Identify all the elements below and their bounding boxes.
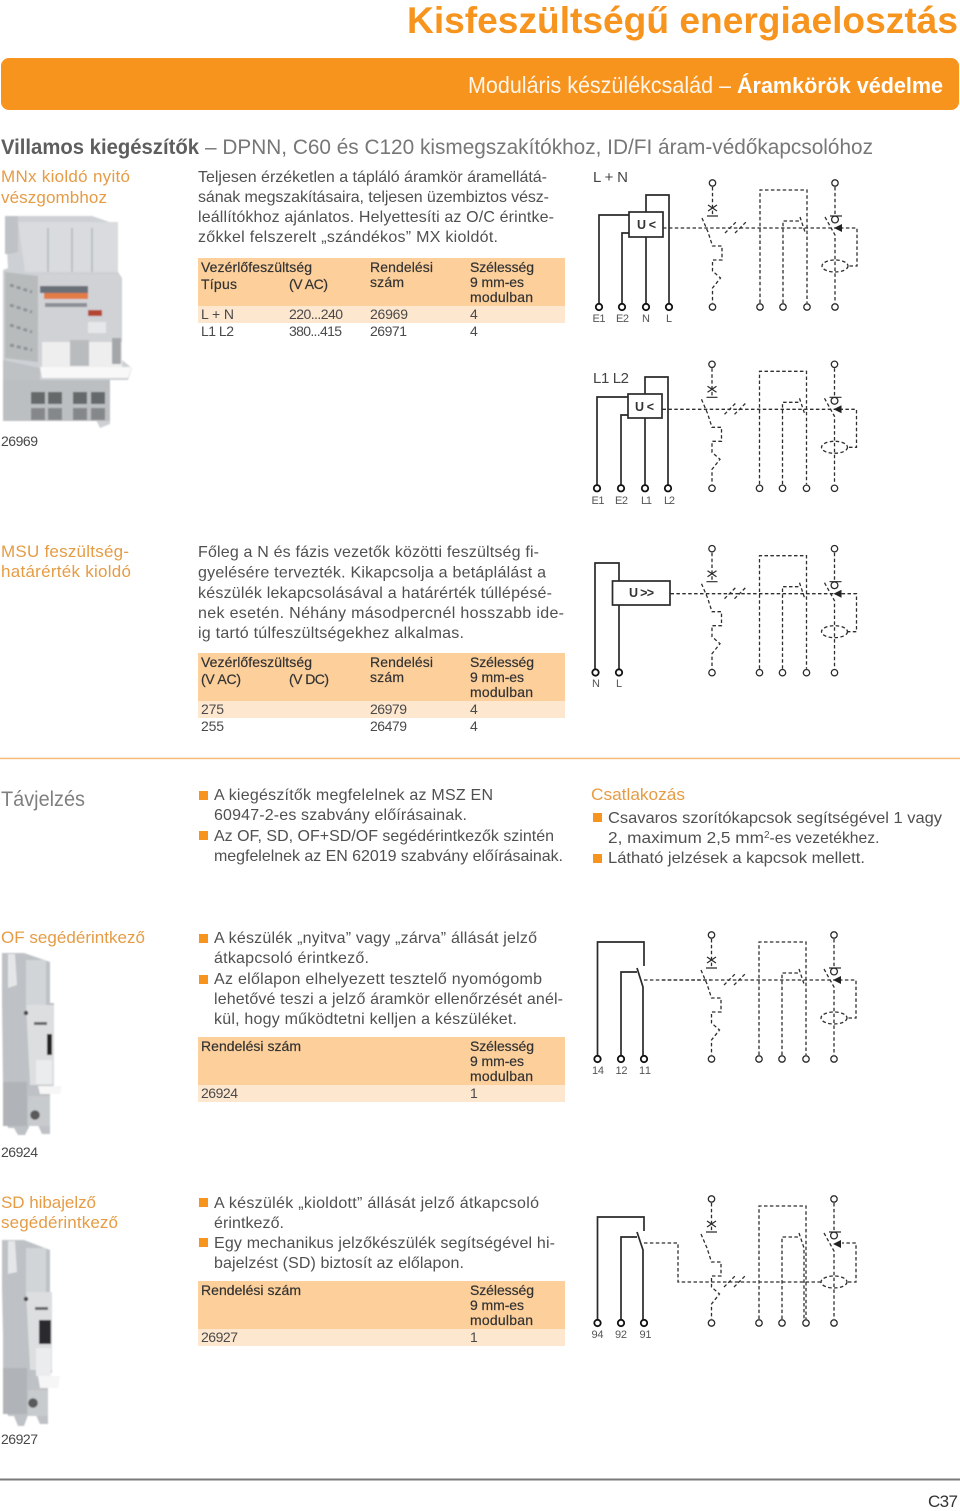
table: OF: Rendelési szám xyxy=(201,1038,301,1054)
text block: MSU description: nek esetén. Néhány másodpercnél hosszabb ide- xyxy=(198,605,564,622)
diagram: L + N: E1 xyxy=(592,313,606,325)
photo: MNx device xyxy=(3,216,132,428)
list: Csatlakozás: Látható jelzések a kapcsok mellett. xyxy=(608,850,865,867)
table: MNx: 26969 xyxy=(370,306,408,322)
heading: MNx xyxy=(1,167,130,207)
table: MNx: Szélesség xyxy=(470,259,534,275)
list: SD: bajelzést (SD) biztosít az előlapon. xyxy=(214,1255,464,1272)
table: OF: 9 mm-es xyxy=(470,1053,524,1069)
table: SD: Rendelési szám xyxy=(201,1282,301,1298)
table: MSU: 275 xyxy=(201,701,224,717)
table: MSU: 26479 xyxy=(370,718,407,734)
table: OF: Szélesség xyxy=(470,1038,534,1054)
list: Csatlakozás: -es vezetékhez. xyxy=(770,830,880,847)
text block: MNx description: sának megszakításaira, teljesen üzembiztos vész- xyxy=(198,189,549,206)
table: MSU: Szélesség xyxy=(470,654,534,670)
diagram: L1 L2 xyxy=(592,361,856,507)
table: MSU: 4 xyxy=(470,718,478,734)
list: Csatlakozás: Csatlakozás xyxy=(591,785,685,804)
diagram: MSU U>> xyxy=(592,546,856,690)
table: OF: 1 xyxy=(470,1085,478,1101)
text block: MNx description: zőkkel felszerelt „szándékos” MX kioldót. xyxy=(198,229,498,246)
list: OF: kül, hogy működtetni kelljen a készüléket. xyxy=(214,1011,517,1028)
diagram: L + N xyxy=(592,169,857,325)
list: Távjelzés: Az OF, SD, OF+SD/OF segédérintkezők szintén xyxy=(214,828,554,845)
diagram: L + N: N xyxy=(642,313,650,325)
list: SD xyxy=(199,1195,555,1272)
list: OF: átkapcsoló érintkező. xyxy=(214,950,369,967)
table: MSU: Rendelési xyxy=(370,654,433,670)
table: MNx: L1 L2 xyxy=(201,323,234,339)
table: MNx: L + N xyxy=(201,306,234,322)
heading: MNx: MNx kioldó nyitó xyxy=(1,167,130,186)
photo: SD device xyxy=(2,1240,60,1426)
table: MNx: (V AC) xyxy=(289,276,328,292)
text block: MSU description: készülék lekapcsolásával a határérték túllépésé- xyxy=(198,585,552,602)
diagram: L1 L2: U < xyxy=(635,400,654,414)
table: SD: 26927 xyxy=(201,1329,238,1345)
heading: MSU: határérték kioldó xyxy=(1,562,131,581)
table: OF xyxy=(198,1037,565,1102)
diagram: SD contact: 92 xyxy=(615,1329,627,1341)
diagram: L1 L2: L2 xyxy=(664,495,675,507)
table: MNx: Rendelési xyxy=(370,259,433,275)
table: SD xyxy=(198,1281,565,1346)
table: MSU: 4 xyxy=(470,701,478,717)
orange banner xyxy=(1,58,959,110)
subheading: Villamos kiegészítők xyxy=(1,136,199,159)
table: SD: 9 mm-es xyxy=(470,1297,524,1313)
product code 26927: 26927 xyxy=(1,1431,38,1447)
diagram: L1 L2: E2 xyxy=(615,495,628,507)
text block: MSU description: ig tartó túlfeszültségekhez alkalmas. xyxy=(198,625,464,642)
table: OF: modulban xyxy=(470,1068,533,1084)
table: MNx: 380...415 xyxy=(289,323,342,339)
table: MNx: 26971 xyxy=(370,323,407,339)
table: MSU: 255 xyxy=(201,718,224,734)
table: MSU xyxy=(198,653,565,734)
diagram: OF contact: 14 xyxy=(592,1065,604,1077)
table: MNx xyxy=(198,258,565,339)
list: Távjelzés: 60947-2-es szabvány előírásainak. xyxy=(214,807,467,824)
heading: MSU: MSU feszültség- xyxy=(1,542,129,561)
heading: MNx: vészgombhoz xyxy=(1,188,107,207)
subheading: – DPNN, C60 és C120 kismegszakítókhoz, ID/FI áram-védőkapcsolóhoz xyxy=(205,136,873,159)
diagram: OF contact xyxy=(592,932,856,1077)
table: MNx: Vezérlőfeszültség xyxy=(201,259,312,275)
list: Távjelzés xyxy=(199,787,563,865)
diagram: MSU U>>: U >> xyxy=(629,586,654,600)
list: SD: érintkező. xyxy=(214,1215,284,1232)
table: MNx: 220...240 xyxy=(289,306,343,322)
diagram: OF contact: 12 xyxy=(616,1065,628,1077)
table: MNx: szám xyxy=(370,274,404,290)
table: MSU: modulban xyxy=(470,684,533,700)
orange banner: Áramkörök védelme xyxy=(737,73,943,98)
table: MNx: Típus xyxy=(201,276,237,292)
heading: SD xyxy=(1,1193,118,1232)
table: SD: Szélesség xyxy=(470,1282,534,1298)
table: SD: 1 xyxy=(470,1329,478,1345)
list: OF xyxy=(199,930,563,1028)
page number: C37 xyxy=(928,1492,958,1511)
diagram: OF contact: 11 xyxy=(639,1065,651,1077)
list: Távjelzés: A kiegészítők megfelelnek az MSZ EN xyxy=(214,787,493,804)
diagram: L + N: U < xyxy=(637,218,656,232)
table: MSU: 9 mm-es xyxy=(470,669,524,685)
diagram: L + N: L xyxy=(666,313,672,325)
heading: Távjelzés: Távjelzés xyxy=(1,788,85,811)
list: SD: Egy mechanikus jelzőkészülék segítségével hi- xyxy=(214,1235,555,1252)
list: OF: A készülék „nyitva” vagy „zárva” állását jelző xyxy=(214,930,537,947)
heading: MSU xyxy=(1,542,131,581)
table: MNx: 4 xyxy=(470,323,478,339)
table: MSU: (V AC) xyxy=(201,671,241,687)
diagram: L1 L2: E1 xyxy=(592,495,604,507)
diagram: SD contact: 91 xyxy=(640,1329,652,1341)
heading: SD: SD hibajelző xyxy=(1,1193,96,1212)
product code 26924: 26924 xyxy=(1,1144,38,1160)
table: MNx: modulban xyxy=(470,289,533,305)
title: Kisfeszültségű energiaelosztás xyxy=(407,0,958,41)
diagram: L1 L2: L1 L2 xyxy=(593,370,629,387)
list: Távjelzés: megfelelnek az EN 62019 szabvány előírásainak. xyxy=(214,848,563,865)
list: Csatlakozás: Csavaros szorítókapcsok segítségével 1 vagy xyxy=(608,810,942,827)
text block: MSU description: gyelésére tervezték. Kikapcsolja a betáplálást a xyxy=(198,564,546,582)
text block: MSU description xyxy=(198,544,564,642)
table: MSU: 26979 xyxy=(370,701,407,717)
text block: MSU description: Főleg a N és fázis vezetők közötti feszültség fi- xyxy=(198,544,539,561)
table: MSU: Vezérlőfeszültség xyxy=(201,654,312,670)
table: MNx: 9 mm-es xyxy=(470,274,524,290)
list: Csatlakozás: 2 xyxy=(764,830,770,841)
table: MSU: szám xyxy=(370,669,404,685)
list: OF: Az előlapon elhelyezett tesztelő nyomógomb xyxy=(214,971,542,988)
text block: MNx description xyxy=(198,169,554,246)
diagram: MSU U>>: L xyxy=(616,678,622,690)
list: Csatlakozás xyxy=(591,785,942,867)
table: OF: 26924 xyxy=(201,1085,238,1101)
heading: OF: OF segédérintkező xyxy=(1,928,145,947)
table: MNx: 4 xyxy=(470,306,478,322)
diagram: L + N: E2 xyxy=(616,313,629,325)
text block: MNx description: Teljesen érzéketlen a tápláló áramkör áramellátá- xyxy=(198,169,547,186)
diagram: L1 L2: L1 xyxy=(641,495,652,507)
orange banner: Moduláris készülékcsalád – xyxy=(468,72,731,98)
diagram: L + N: L + N xyxy=(593,169,628,186)
heading: SD: segédérintkező xyxy=(1,1213,118,1232)
table: SD: modulban xyxy=(470,1312,533,1328)
diagram: SD contact xyxy=(592,1196,856,1341)
photo: OF device xyxy=(2,953,62,1135)
list: SD: A készülék „kioldott” állását jelző átkapcsoló xyxy=(214,1195,539,1212)
diagram: SD contact: 94 xyxy=(592,1329,604,1341)
text block: MNx description: leállítókhoz ajánlatos. Helyettesíti az O/C érintke- xyxy=(198,209,554,226)
diagram: MSU U>>: N xyxy=(592,678,600,690)
table: MSU: (V DC) xyxy=(289,671,329,687)
list: OF: lehetővé teszi a jelző áramkör ellenőrzését anél- xyxy=(214,991,563,1008)
product code 26969: 26969 xyxy=(1,433,38,449)
list: Csatlakozás: 2, maximum 2,5 mm xyxy=(608,830,764,847)
